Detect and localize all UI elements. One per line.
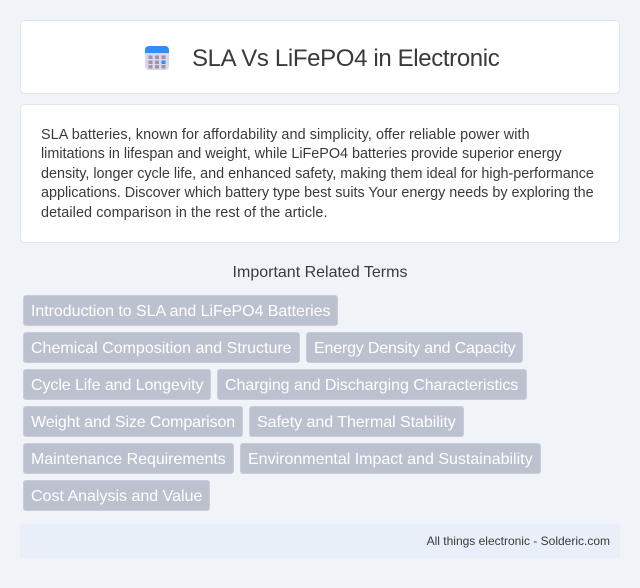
tag: Cycle Life and Longevity	[31, 377, 203, 394]
tag: Safety and Thermal Stability	[257, 414, 456, 431]
tag	[23, 480, 210, 511]
tag	[23, 443, 234, 474]
intro paragraph: detailed comparison in the rest of the article.	[41, 205, 328, 221]
title: SLA Vs LiFePO4 in Electronic	[192, 45, 499, 72]
footer credit: All things electronic - Solderic.com	[427, 534, 610, 548]
intro paragraph: limitations in lifespan and weight, while LiFePO4 batteries provide superior energy	[41, 146, 562, 162]
tag	[217, 369, 527, 400]
intro paragraph: SLA batteries, known for affordability and simplicity, offer reliable power with	[41, 127, 530, 143]
tag: Maintenance Requirements	[31, 451, 226, 468]
tag	[306, 332, 523, 363]
footer	[20, 524, 620, 558]
tag	[240, 443, 541, 474]
tag: Chemical Composition and Structure	[31, 340, 292, 357]
tag	[23, 369, 211, 400]
tag	[23, 295, 338, 326]
tag	[23, 406, 243, 437]
intro paragraph: applications. Discover which battery type best suits Your energy needs by exploring the	[41, 185, 594, 201]
intro text panel	[20, 104, 620, 243]
tag: Environmental Impact and Sustainability	[248, 451, 533, 468]
related terms tags	[23, 295, 541, 511]
header panel	[20, 20, 620, 94]
tag	[23, 332, 300, 363]
section heading: Important Related Terms	[233, 264, 407, 281]
tag: Charging and Discharging Characteristics	[225, 377, 518, 394]
intro paragraph	[41, 127, 594, 221]
tag: Energy Density and Capacity	[314, 340, 515, 357]
intro paragraph: density, longer cycle life, and enhanced safety, making them ideal for high-performance	[41, 166, 594, 182]
tag	[249, 406, 464, 437]
tag: Weight and Size Comparison	[31, 414, 235, 431]
tag: Introduction to SLA and LiFePO4 Batteries	[31, 303, 330, 320]
icon: calendar	[145, 46, 169, 70]
tag: Cost Analysis and Value	[31, 488, 202, 505]
